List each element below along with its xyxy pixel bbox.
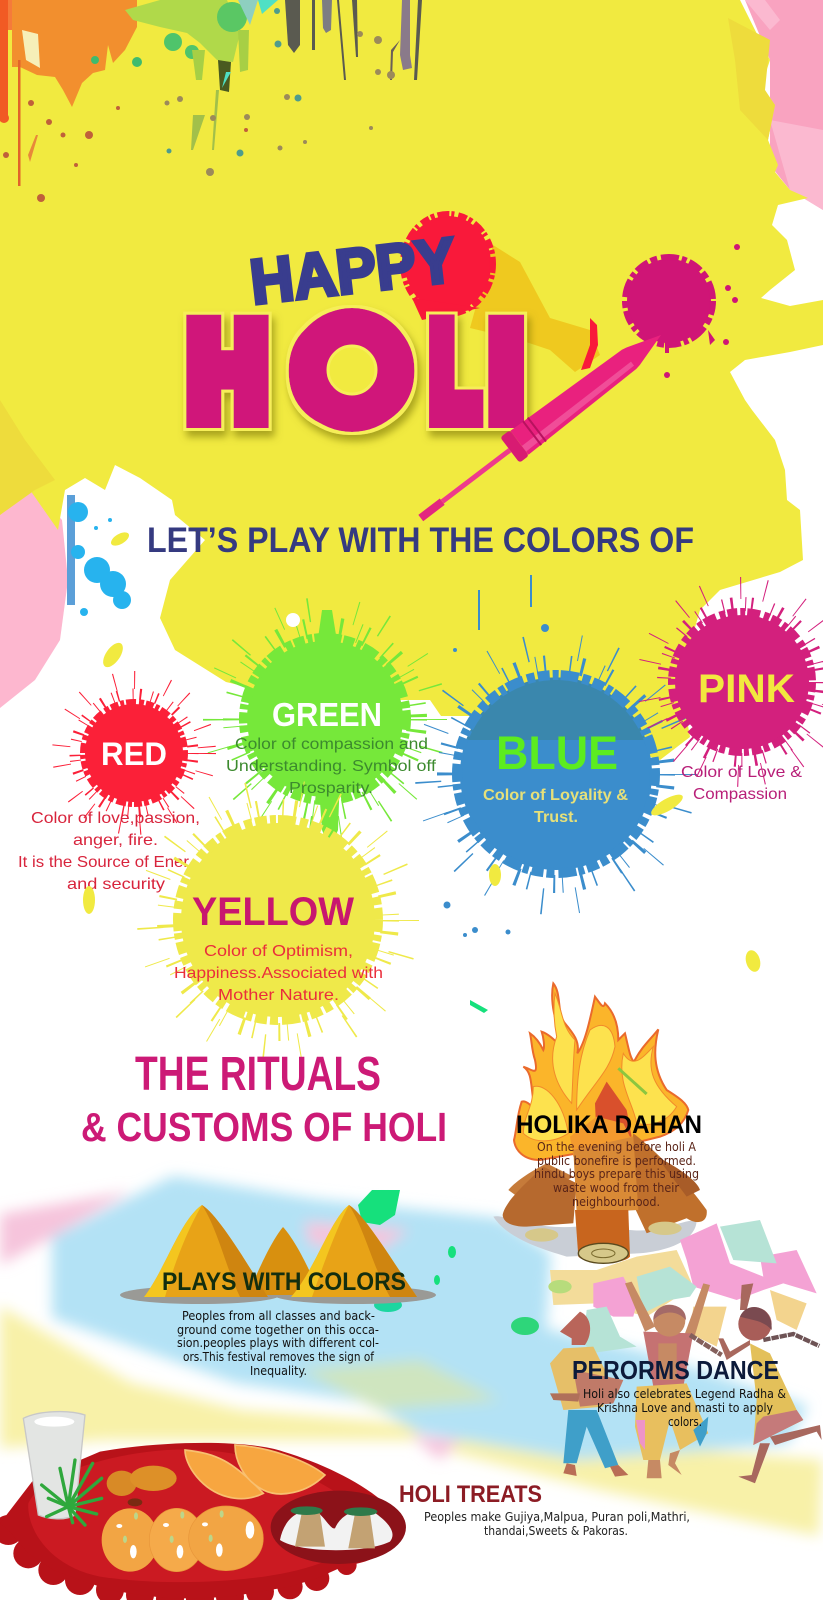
- panel: performs dance text: colors.: [668, 1414, 702, 1429]
- panel: blue text: Trust.: [534, 809, 578, 826]
- pastel brush background: [0, 1176, 823, 1536]
- panel: holi treats text: Peoples make Gujiya,Malpua, Puran poli,Mathri,: [424, 1509, 690, 1524]
- title: Holi: O: [296, 298, 407, 444]
- icon: pichkari water gun: [411, 322, 671, 531]
- panel: blue text: Color of Loyality &: [483, 787, 628, 804]
- heading: rituals: THE RITUALS: [135, 1048, 381, 1101]
- panel: holika dahan text: public bonefire is performed.: [537, 1153, 696, 1168]
- panel: pink text: [681, 667, 802, 803]
- heading: rituals: [81, 1048, 447, 1150]
- panel: plays with colors text: [162, 1268, 406, 1378]
- green paint drops: [358, 1000, 539, 1335]
- panel: plays with colors text: ors.This festival removes the sign of: [183, 1349, 375, 1364]
- title: Holi: L: [431, 298, 479, 444]
- title: Holi: I: [491, 299, 521, 444]
- red and gold blot behind the title: [403, 214, 600, 372]
- panel: green text: [226, 696, 437, 797]
- paint drips top left: [0, 0, 422, 202]
- darker yellow band: [0, 18, 775, 515]
- icon: thali of sweets: [0, 1412, 406, 1600]
- heading: rituals: & CUSTOMS OF HOLI: [81, 1104, 447, 1150]
- panel: yellow text: Color of Optimism,: [204, 943, 353, 960]
- top right pink paint: [745, 0, 823, 210]
- panel: holika dahan text: waste wood from their: [553, 1180, 680, 1195]
- panel: red text: Color of love,passion,: [31, 810, 200, 827]
- icon: bonfire: [493, 983, 707, 1263]
- panel: pink text: Compassion: [693, 786, 787, 803]
- panel: green text: GREEN: [272, 696, 382, 733]
- panel: performs dance text: [572, 1355, 786, 1429]
- panel: plays with colors text: sion.peoples plays with different col-: [177, 1335, 379, 1350]
- panel: yellow text: Mother Nature.: [218, 987, 339, 1004]
- panel: red text: RED: [101, 736, 167, 772]
- red splat: [61, 680, 207, 826]
- pink splat: [648, 588, 823, 776]
- blue splat: [428, 575, 684, 937]
- panel: red text: It is the Source of Ener: [18, 854, 190, 871]
- panel: plays with colors text: Inequality.: [250, 1363, 307, 1378]
- panel: holika dahan text: neighbourhood.: [572, 1194, 660, 1209]
- panel: holika dahan text: [516, 1111, 702, 1209]
- title: Holi: [189, 298, 521, 444]
- heading: let's play: LET’S PLAY WITH THE COLORS OF: [147, 521, 694, 560]
- icon: colour powder mounds: [120, 1205, 436, 1304]
- panel: yellow text: [174, 890, 383, 1004]
- pale paint drops: [83, 530, 763, 973]
- panel: green text: Prosparity.: [289, 780, 373, 797]
- panel: plays with colors text: PLAYS WITH COLORS: [162, 1268, 406, 1296]
- blue splatter left: [67, 495, 131, 616]
- panel: plays with colors text: ground come together on this occa-: [177, 1322, 379, 1337]
- green splat: [215, 609, 435, 850]
- panel: yellow text: Happiness.Associated with: [174, 965, 383, 982]
- panel: pink text: PINK: [698, 667, 795, 711]
- panel: pink text: Color of Love &: [681, 764, 802, 781]
- dance paint background: [548, 1220, 817, 1353]
- panel: red text: anger, fire.: [73, 832, 158, 849]
- panel: blue text: BLUE: [496, 726, 618, 779]
- panel: red text: [18, 736, 200, 893]
- panel: performs dance text: Holi also celebrates Legend Radha &: [583, 1386, 786, 1401]
- panel: performs dance text: Krishna Love and masti to apply: [597, 1400, 774, 1415]
- title: Holi: H: [189, 299, 266, 444]
- yellow paint background: [0, 0, 823, 760]
- panel: holika dahan text: hindu boys prepare this using: [534, 1166, 699, 1181]
- panel: holi treats text: thandai,Sweets & Pakoras.: [484, 1523, 628, 1538]
- yellow splat: [150, 792, 406, 1048]
- panel: performs dance text: PERORMS DANCE: [572, 1355, 779, 1385]
- title: Happy: HAPPY: [247, 225, 459, 318]
- panel: blue text: [483, 726, 628, 826]
- O counter: [328, 346, 376, 394]
- left pink paint: [0, 490, 68, 708]
- panel: green text: Understanding. Symbol off: [226, 758, 437, 775]
- panel: yellow text: YELLOW: [192, 890, 354, 934]
- panel: plays with colors text: Peoples from all classes and back-: [182, 1308, 375, 1323]
- panel: red text: and security: [67, 876, 165, 893]
- panel: holi treats text: [399, 1481, 690, 1538]
- panel: green text: Color of compassion and: [235, 736, 428, 753]
- panel: holika dahan text: On the evening before holi A: [537, 1139, 696, 1154]
- panel: holika dahan text: HOLIKA DAHAN: [516, 1111, 702, 1139]
- icon: dancing people: [550, 1282, 822, 1483]
- panel: holi treats text: HOLI TREATS: [399, 1481, 542, 1508]
- magenta blot: [625, 244, 740, 378]
